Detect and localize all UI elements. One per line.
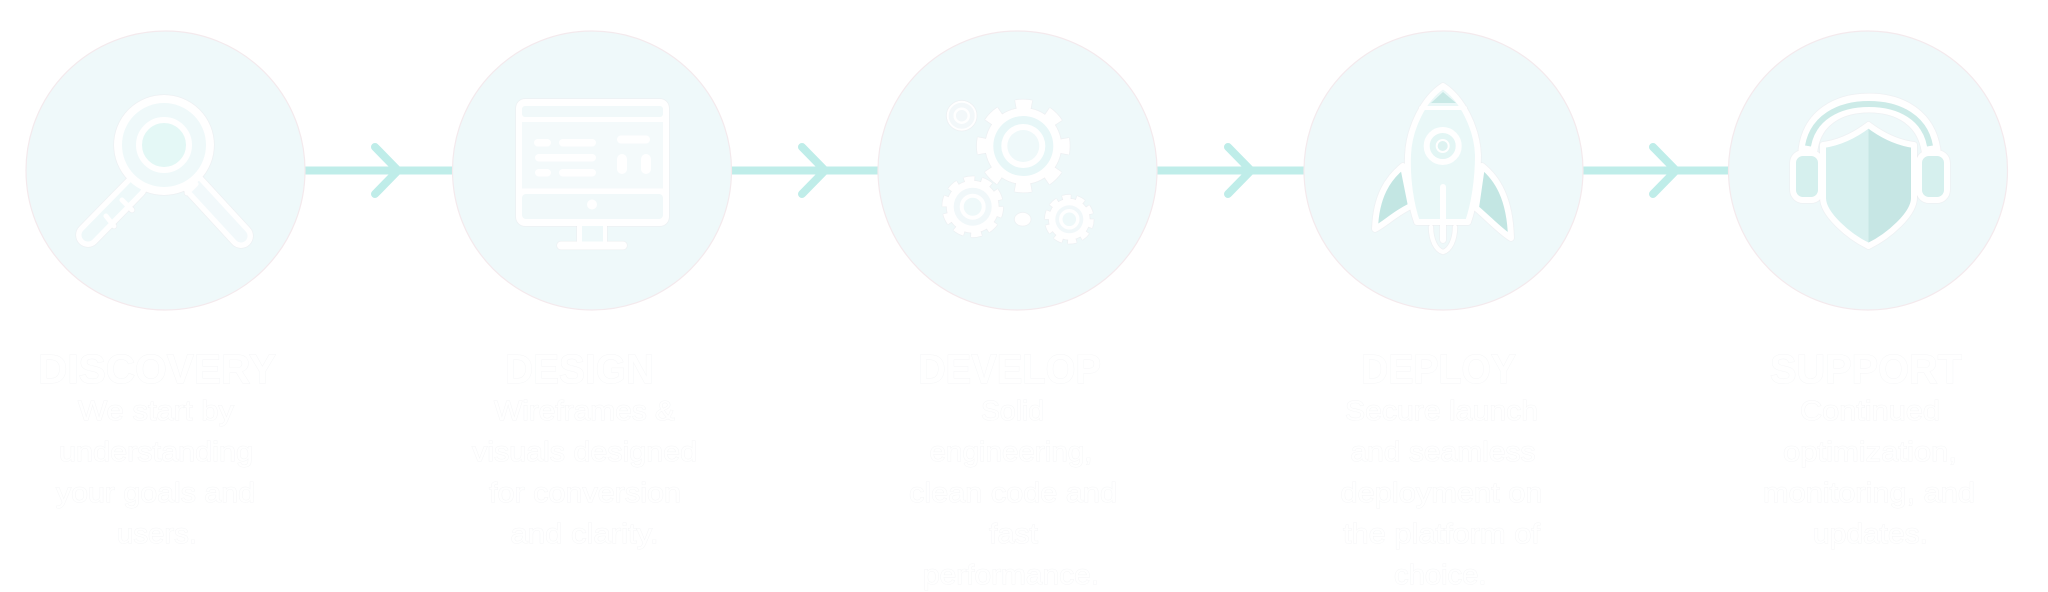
text: discovery description: We start by: [78, 395, 234, 426]
text: support description: [1763, 395, 1975, 549]
large gear: [983, 106, 1063, 186]
text: develop description: engineering,: [930, 436, 1092, 467]
arrow: develop to deploy: [1157, 147, 1304, 194]
panel: design step: [452, 31, 732, 549]
heading: support: SUPPORT: [1770, 346, 1962, 392]
text: support description: optimization,: [1783, 436, 1957, 467]
heading: develop: DEVELOP: [918, 346, 1101, 392]
text: design description: and clarity.: [510, 518, 658, 549]
panel: develop step: [878, 31, 1157, 590]
text: discovery description: users.: [117, 518, 197, 549]
text: design description: [472, 395, 697, 549]
text: deploy description: the platform of: [1343, 518, 1540, 549]
heading: deploy: DEPLOY: [1361, 346, 1516, 392]
small gear top left: [948, 102, 976, 130]
text: deploy description: and seamless: [1350, 436, 1536, 467]
arrow: design to develop: [731, 147, 878, 194]
lower right gear: [1048, 198, 1091, 241]
text: discovery description: your goals and: [56, 477, 255, 508]
text: support description: Continued: [1800, 395, 1940, 426]
design circle: [452, 31, 732, 310]
support circle: [1728, 31, 2008, 310]
text: deploy description: deployment on: [1340, 477, 1542, 508]
text: develop description: Solid: [981, 395, 1044, 426]
text: develop description: fast: [989, 518, 1038, 549]
text: support description: updates.: [1813, 518, 1928, 549]
deploy circle: [1304, 31, 1583, 310]
text: design description: for conversion: [489, 477, 681, 508]
arrow: discovery to design: [305, 147, 453, 194]
icon: desktop monitor: [516, 99, 669, 250]
text: deploy description: [1340, 395, 1542, 590]
discovery circle: [26, 31, 305, 310]
heading: discovery: DISCOVERY: [38, 346, 276, 392]
panel: support step: [1728, 31, 2008, 549]
text: deploy description: choice.: [1394, 559, 1486, 590]
text: discovery description: [56, 395, 255, 549]
icon: magnifying glass: [88, 99, 241, 236]
panel: deploy step: [1304, 31, 1583, 590]
text: discovery description: understanding: [59, 436, 253, 467]
heading: design: DESIGN: [505, 346, 654, 392]
icon: rocket: [1375, 86, 1511, 252]
text: develop description: clean code and: [909, 477, 1117, 508]
arrow: deploy to support: [1583, 147, 1728, 194]
panel: discovery step: [26, 31, 305, 549]
icon: gears: [946, 102, 1091, 241]
text: support description: monitoring, and: [1763, 477, 1975, 508]
lower left gear: [946, 180, 1000, 234]
text: develop description: [909, 395, 1117, 590]
develop circle: [878, 31, 1157, 310]
text: develop description: performance.: [923, 559, 1099, 590]
icon: shield with headset: [1793, 103, 1947, 246]
text: design description: visuals designed: [472, 436, 697, 467]
text: deploy description: Secure launch: [1345, 395, 1538, 426]
text: design description: Wireframes &: [494, 395, 675, 426]
